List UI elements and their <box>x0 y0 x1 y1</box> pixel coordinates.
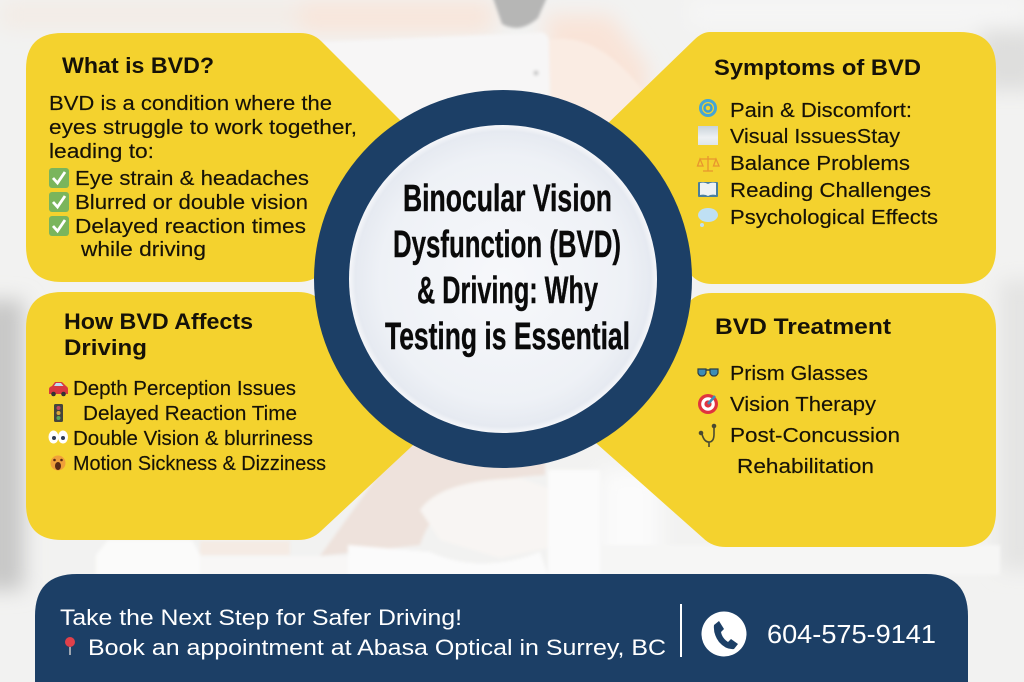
list: treatments: Vision Therapy <box>730 393 877 416</box>
icon: eyes <box>48 430 68 444</box>
panel: Symptoms of BVD <box>570 32 996 284</box>
center circle with title <box>314 90 692 468</box>
heading: BVD Treatment: BVD Treatment <box>715 314 892 339</box>
icon: stethoscope <box>700 424 716 447</box>
list: BVD effects: Eye strain & headaches <box>75 167 309 190</box>
list: BVD effects: Delayed reaction times <box>75 215 306 238</box>
list: driving effects: Double Vision & blurriness <box>73 427 313 450</box>
heading: Symptoms of BVD: Symptoms of BVD <box>714 55 921 80</box>
icon: phone <box>702 612 746 656</box>
list: driving effects: Delayed Reaction Time <box>83 402 297 425</box>
list: symptoms: Balance Problems <box>730 152 910 175</box>
icon: glasses <box>698 369 718 376</box>
list: symptoms: Visual IssuesStay <box>730 125 901 148</box>
text: call to action: Book an appointment at Abasa Optical in Surrey, BC <box>88 635 666 660</box>
icon: target <box>698 394 718 414</box>
list: treatments <box>698 362 900 478</box>
list: BVD effects <box>49 167 309 261</box>
list: driving effects: Depth Perception Issues <box>73 377 296 400</box>
icon: fog <box>698 126 718 145</box>
title: Binocular Vision <box>403 178 612 220</box>
list: treatments: Prism Glasses <box>730 362 868 385</box>
heading: What is BVD: What is BVD? <box>62 53 214 78</box>
icon: traffic light <box>54 404 63 422</box>
icon: balance scale <box>698 156 719 171</box>
list: BVD effects: while driving <box>80 238 206 261</box>
title: Dysfunction (BVD) <box>393 224 621 266</box>
text: call to action: Take the Next Step for Safer Driving! <box>60 605 462 630</box>
list: treatments: Post-Concussion <box>730 424 900 447</box>
icon: dizzy face <box>50 456 66 470</box>
list: treatments: Rehabilitation <box>737 455 874 478</box>
call to action bar <box>35 574 968 682</box>
icon: thought bubble <box>698 208 718 227</box>
text block: BVD definition: BVD is a condition where the <box>49 92 332 115</box>
title: & Driving: Why <box>417 270 598 312</box>
phone number: 604-575-9141 <box>767 619 936 649</box>
heading: How BVD Affects Driving <box>64 309 253 360</box>
icon: open book <box>698 182 718 197</box>
icon: cyclone <box>700 100 716 116</box>
text block: BVD definition: leading to: <box>49 140 154 163</box>
icon: map pin <box>65 637 75 655</box>
icon: car <box>49 382 68 396</box>
list: driving effects: Motion Sickness & Dizziness <box>73 452 326 475</box>
text block: BVD definition: eyes struggle to work together, <box>49 116 357 139</box>
heading: How BVD Affects Driving: Driving <box>64 335 147 360</box>
list: symptoms: Pain & Discomfort: <box>730 99 912 122</box>
list: BVD effects: Blurred or double vision <box>75 191 308 214</box>
text block: BVD definition <box>49 92 357 163</box>
list: symptoms <box>698 99 938 229</box>
list: symptoms: Reading Challenges <box>730 179 931 202</box>
list: driving effects <box>48 377 326 475</box>
title <box>385 178 630 358</box>
text: call to action <box>60 605 666 660</box>
title: Testing is Essential <box>385 316 630 358</box>
panel: What is BVD <box>26 33 440 282</box>
heading: How BVD Affects Driving: How BVD Affects <box>64 309 253 334</box>
panel: BVD Treatment <box>570 293 996 547</box>
panel: How BVD Affects Driving <box>26 292 440 540</box>
list: symptoms: Psychological Effects <box>730 206 938 229</box>
